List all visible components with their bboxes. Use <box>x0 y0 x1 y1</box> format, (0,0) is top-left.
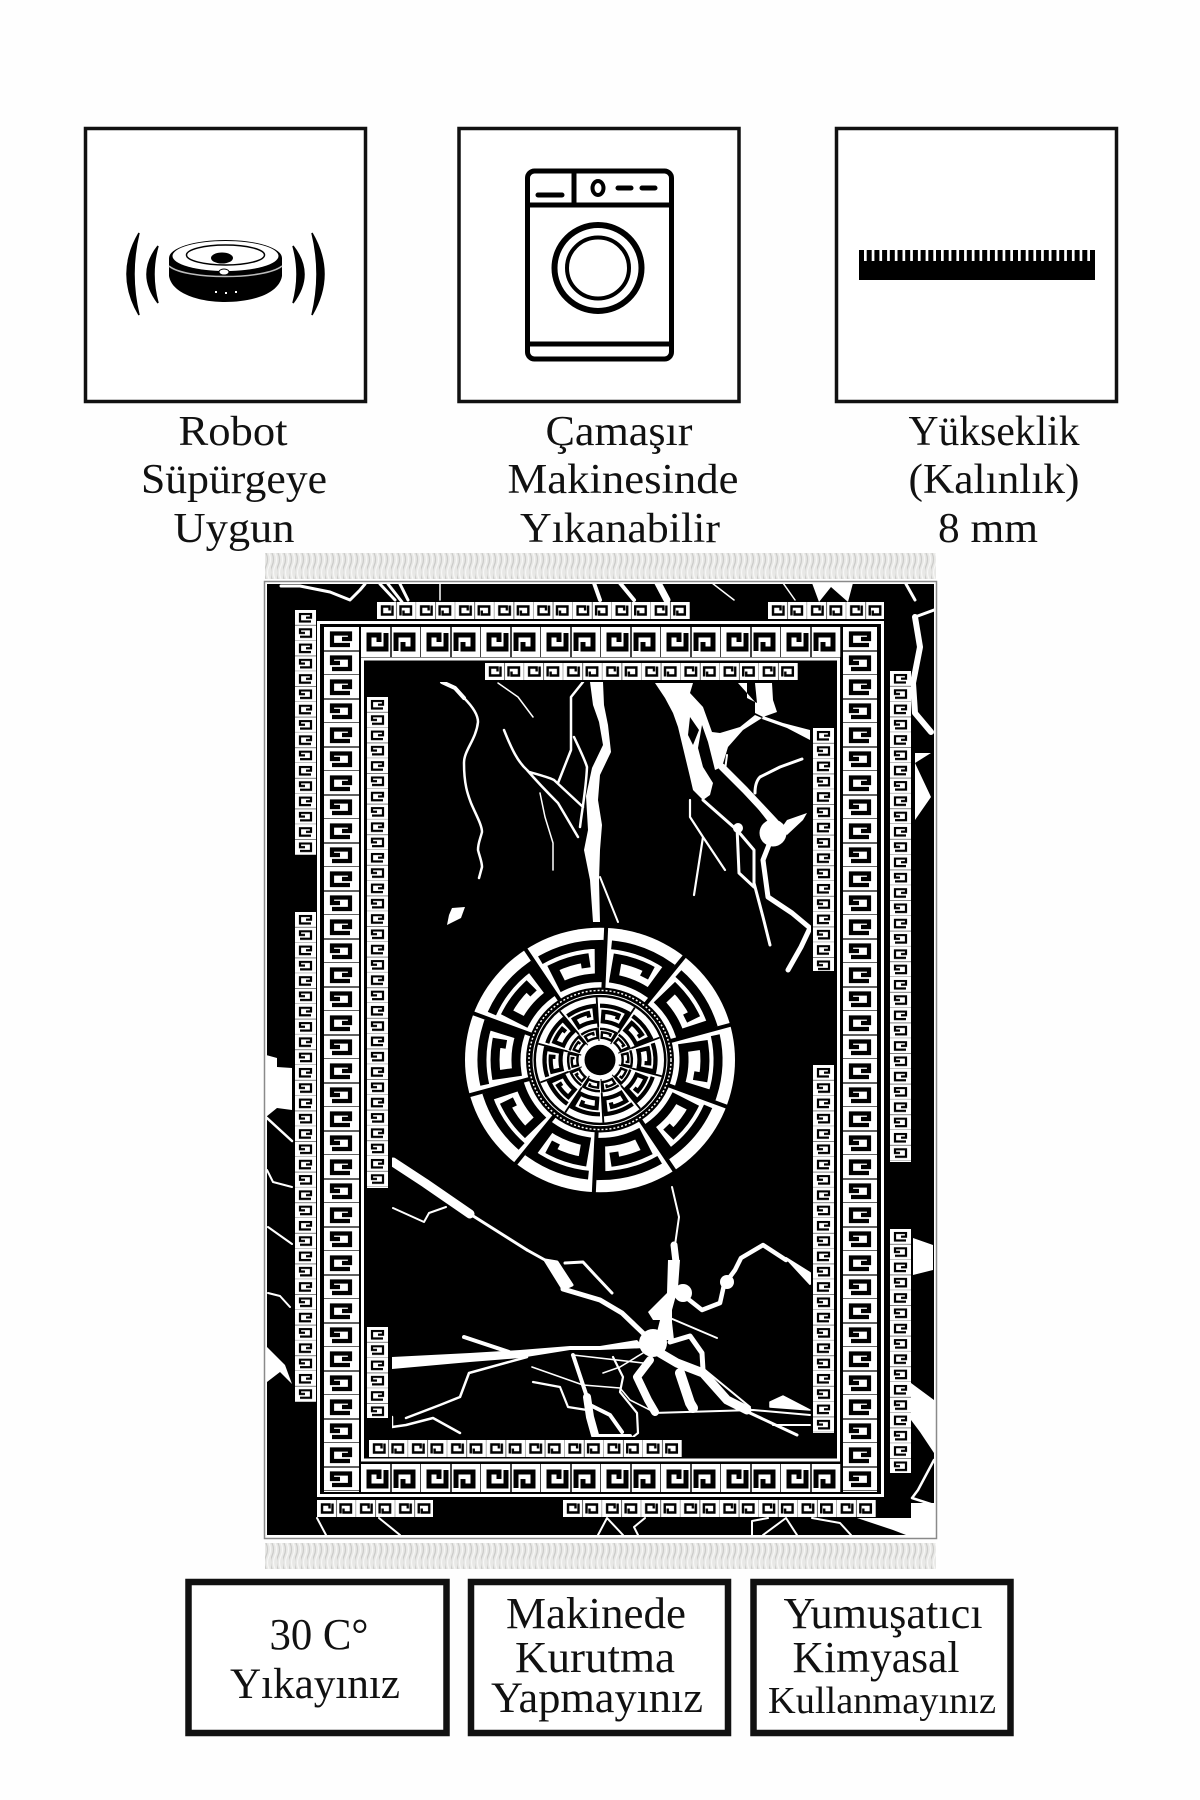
small key column: left inner lower <box>367 1327 388 1418</box>
large key border: left <box>324 627 359 1492</box>
small key column: left outer upper <box>295 610 316 855</box>
rug: top fringe <box>265 553 936 579</box>
icon: carpet pile cross-section <box>859 256 1095 280</box>
large key border: bottom <box>361 1464 841 1492</box>
label: Çamaşır Makinesinde Yıkanabilir <box>508 409 738 552</box>
care box: 30 C wash: Yıkayınız <box>230 1661 400 1708</box>
small key column: right inner upper <box>813 728 834 971</box>
rug: bottom fringe <box>265 1543 936 1569</box>
care box: no softener chemicals <box>754 1582 1010 1733</box>
small key band: top inner <box>485 663 798 680</box>
panel: pile height <box>836 128 1116 552</box>
vertical vein and right branch <box>672 1187 679 1260</box>
marble veins: outer margin <box>266 583 935 1537</box>
care box: no softener chemicals: Yumuşatıcı <box>784 1589 982 1638</box>
care box: no machine drying: Kurutma <box>515 1633 675 1682</box>
care box: no softener chemicals: Kimyasal <box>792 1633 960 1682</box>
small key column: left inner upper <box>367 697 388 1188</box>
small key column: right inner lower <box>813 1065 834 1433</box>
icon: robot vacuum <box>127 233 324 315</box>
care box: no machine drying: Yapmayınız <box>491 1675 703 1722</box>
label: Çamaşır Makinesinde Yıkanabilir: Makinesinde <box>508 457 738 503</box>
upper centre veins <box>584 682 611 922</box>
outer frame line <box>318 622 882 1496</box>
marble veins: inner field <box>392 682 810 1437</box>
care box: no softener chemicals: Kullanmayınız <box>768 1680 996 1722</box>
label: Çamaşır Makinesinde Yıkanabilir: Yıkanabilir <box>520 506 720 552</box>
label: Yükseklik (Kalınlık) 8 mm: Yükseklik <box>908 409 1080 455</box>
care box: no machine drying: Makinede <box>506 1589 686 1638</box>
care box: 30 C wash <box>188 1582 446 1733</box>
upper right marble mass <box>655 683 762 800</box>
small key band: bottom outer short <box>317 1500 433 1517</box>
label: Robot Süpürgeye Uygun <box>141 409 327 552</box>
label: Robot Süpürgeye Uygun: Süpürgeye <box>141 457 327 503</box>
box: washer icon frame <box>459 128 739 402</box>
large key border: top <box>361 627 841 657</box>
box: pile icon frame <box>836 128 1116 402</box>
small key band: bottom inner <box>369 1440 682 1457</box>
label: Çamaşır Makinesinde Yıkanabilir: Çamaşır <box>546 409 693 455</box>
care box: no machine drying <box>471 1582 728 1733</box>
label: Yükseklik (Kalınlık) 8 mm: 8 mm <box>938 506 1038 552</box>
central star and lower branches <box>639 1329 667 1357</box>
rug: black marble panel with Greek key frame <box>264 582 936 1538</box>
small key column: right outer lower <box>890 1229 911 1473</box>
lower left diagonal <box>393 1162 470 1214</box>
panel: robot vacuum suitable <box>86 128 366 552</box>
small key column: right outer upper <box>890 671 911 1162</box>
medallion: Greek key roundel <box>465 927 735 1193</box>
icon: washing machine <box>527 171 672 359</box>
box: robot icon frame <box>86 128 366 402</box>
panel: machine washable <box>459 128 739 552</box>
label: Yükseklik (Kalınlık) 8 mm: (Kalınlık) <box>908 457 1080 503</box>
small key band: top outer long <box>377 602 690 619</box>
inner frame line <box>362 659 838 1460</box>
small key band: bottom outer long <box>563 1500 876 1517</box>
care box: 30 C wash: 30 C° <box>270 1610 368 1659</box>
label: Robot Süpürgeye Uygun: Robot <box>178 409 288 455</box>
label: Yükseklik (Kalınlık) 8 mm <box>908 409 1080 552</box>
large key border: right <box>843 627 877 1492</box>
small key band: top outer short <box>768 602 884 619</box>
label: Robot Süpürgeye Uygun: Uygun <box>174 506 294 552</box>
small key column: left outer lower <box>295 912 316 1402</box>
